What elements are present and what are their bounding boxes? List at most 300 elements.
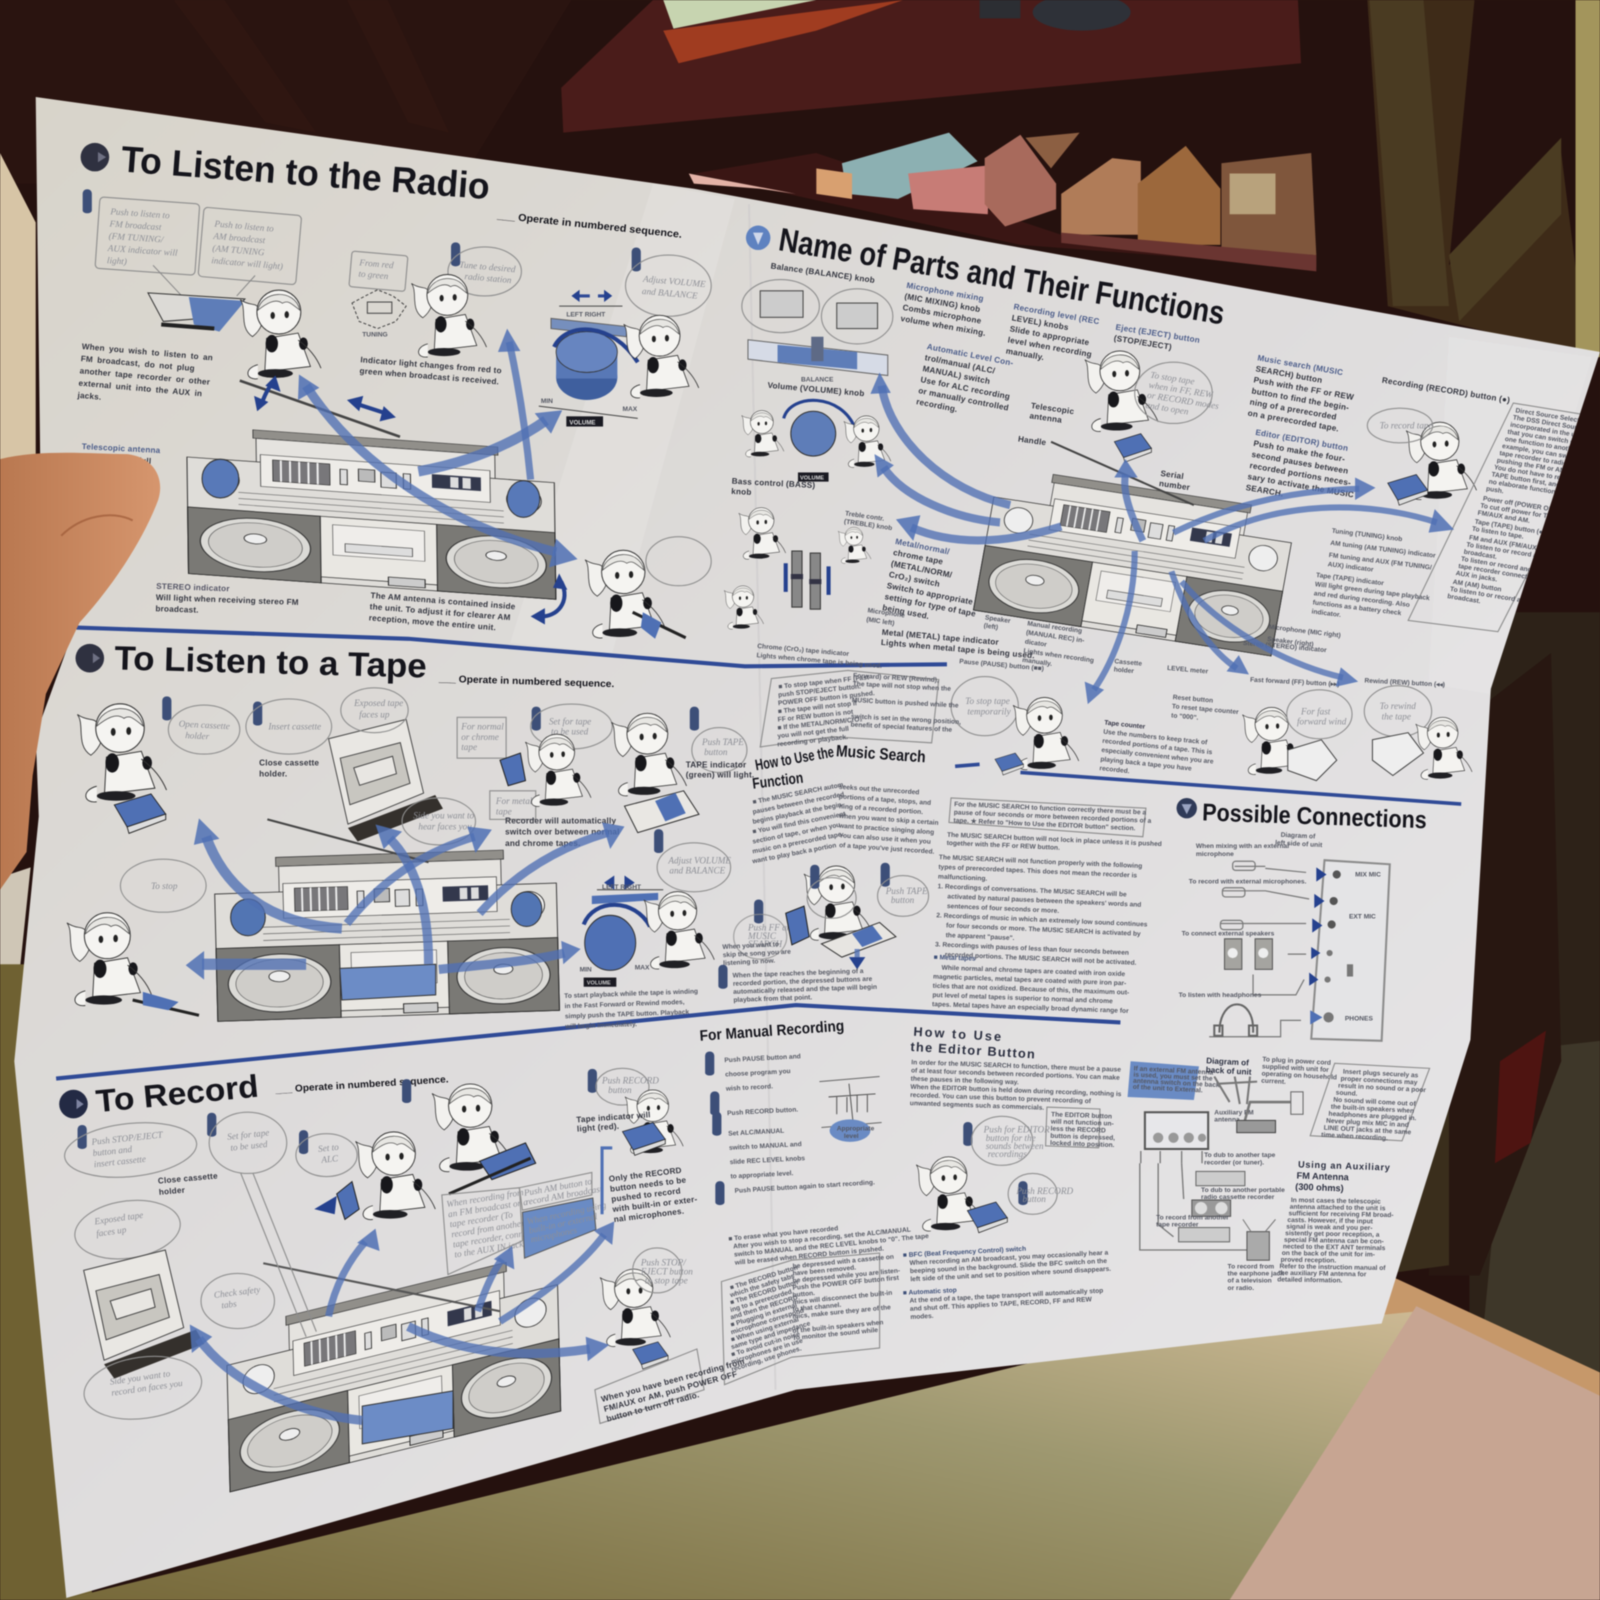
box: power notes: Insert plugs securely as [1343,1068,1419,1079]
note: start playback: To start playback while the tape is winding [564,988,698,1000]
character: set to ALC [356,1132,435,1220]
note: telescopic antenna: Pull out to its full [81,453,152,466]
back panel diagram: of the unit to External. [1133,1084,1203,1094]
note: close cassette holder: holder [159,1186,186,1197]
text: malfunctioning list: for four seconds or more. The MUSIC SEARCH is activated by [946,922,1141,938]
title: Name of Parts and Their Functions: Name of Parts and Their Functions [776,220,1227,331]
label: to record from telephone: To record from [1228,1263,1274,1270]
box: FM broadcast: tape recorder (To [449,1209,514,1229]
step 5 bubble [588,1068,659,1105]
arrow: to eject [1114,459,1143,541]
text: When the EDITOR button is held down during recording, nothing is [910,1084,1122,1098]
label: tape counter: playing back a tape you have [1100,756,1192,773]
step 5 bubble: button [608,1085,632,1095]
label: metal indicator: Lights when metal tape is being used. [881,638,1035,660]
bubble: push tape: Push TAPE [885,886,928,896]
bubble: FF: For fast [1300,706,1331,716]
note: FM broadcast: external unit into the AUX in [78,379,203,398]
box: direct source selector: To listen to tape. [1471,526,1524,541]
switch [500,753,526,786]
bubble: record: To record tape [1380,421,1433,431]
character: pause [1013,697,1079,770]
volume knob: VOLUME [569,419,596,426]
box: power notes: time when recording. [1321,1132,1388,1142]
text: music search intro: ning of a recorded portion. [839,803,923,816]
step 1 callout boxes: AUX indicator will [107,243,178,258]
boombox: record [226,1250,561,1492]
box: power notes: Never plug mix MIC in and [1326,1118,1409,1129]
section: Name of Parts and Their Functions [724,220,1600,784]
character: listener [724,586,764,629]
box: record notes: ing to a prerecorded [730,1289,793,1314]
label: record button: Recording (RECORD) button (●) [1381,376,1511,405]
device: tv or radio [1243,1219,1276,1260]
text: when tape reaches [718,965,877,1004]
character: stop [67,913,151,1006]
bubble: pause: To stop tape [965,696,1010,706]
back panel diagram: is used, you must set the [1133,1072,1213,1083]
bubble: side you want: record on faces you [111,1378,184,1398]
step 1 callout boxes: Push to listen to [213,218,275,234]
label: microphone mixing: Microphone mixing [906,281,984,303]
bubble: side you want: Side you want to [109,1368,171,1387]
bubble: push stop [633,1248,693,1293]
label: recording level: manually. [1005,347,1045,362]
box: direct source selector: You do not have to release the [1494,464,1589,486]
arrow: press down [849,949,865,969]
power cord [1237,1092,1303,1133]
text: when tape reaches: recorded portion, the depressed buttons are [733,976,873,988]
bubble: FF [1287,690,1352,739]
text: auxiliary: casts. However, if the input [1287,1217,1374,1225]
box: direct source selector: example, you can switch from [1502,443,1596,465]
text: music search lock: The MUSIC SEARCH button will not lock in place unless it is pushed [947,832,1162,848]
box: top note: you will not get the full [777,726,849,740]
box: power off: FM/AUX or AM, push POWER OFF [603,1369,738,1414]
box: direct source selector: To cut off power for TAPE, [1480,503,1563,522]
label: speaker left, manual rec: Speaker [984,614,1011,625]
step 1 bubble: Open cassette [178,719,230,731]
box: direct source selector: AUX in jacks. [1455,570,1498,584]
label: to plug in: current. [1261,1078,1286,1086]
arrow: to record [1173,478,1376,533]
text: music search intro: want to play back a portion [751,842,837,866]
character: stop [600,1269,670,1347]
text: music search intro [740,781,941,866]
note: only record: with built-in or exter- [611,1195,698,1214]
knob: MAX [635,964,650,971]
function pad [449,1143,536,1194]
unit side panel [1311,860,1390,1041]
label: antenna / handle / serial: antenna [1029,411,1063,425]
box: record notes: of the built-in speakers when [792,1319,884,1335]
text: unwanted segments such as commercials. [910,1100,1044,1112]
box: editor note: locked into position. [1050,1140,1115,1149]
callout: from red to green: From red [358,257,394,270]
step 2 bubble: Set for tape [227,1127,270,1142]
arrow: to mic mix [870,372,1010,505]
antenna [263,1263,500,1311]
heading: using an auxiliary FM antenna: (300 ohms) [1295,1182,1344,1193]
label: microphone left: (MIC left) [866,616,895,627]
box: built-in mic [522,1198,611,1258]
text: automatic stop: At the end of a tape, the tape transport will automatically stop [909,1288,1103,1305]
step 4: Push PAUSE button again to start recording. [734,1179,875,1195]
arrow: stop [194,818,342,929]
label: chrome indicator: Chrome (CrO₂) tape indicator [757,643,850,658]
step 5 bubble: and BALANCE [669,865,726,875]
cassette illustration [329,719,443,842]
label: antenna / handle / serial: Serial [1160,469,1184,481]
heading: using an auxiliary FM antenna: FM Antenna [1296,1171,1350,1182]
arrow: alc [329,1229,380,1316]
speakers [1224,939,1272,969]
bubble: REW [1364,686,1432,737]
box: top note: push STOP/EJECT button. [778,683,861,699]
label: metal switch: (METAL/NORM/ [890,559,953,580]
box: direct source selector: broadcast. [1447,593,1481,605]
text: auxiliary: detailed information. [1277,1276,1343,1285]
label: tape counter: Tape counter [1104,720,1146,731]
label: speaker left, manual rec: dicator [1024,639,1048,649]
note: only record: pushed to record [611,1186,681,1204]
note: stereo indicator: STEREO indicator [156,582,230,593]
bubble: push stop: to stop tape [645,1276,688,1286]
label: microphone mixing: Combs microphone [902,303,982,326]
label: tuning cluster: AUX) indicator [1327,561,1374,574]
character: press tape [611,713,687,796]
bubble: push FF: Push FF and [747,923,796,933]
panel: music search notes [718,670,1162,1015]
label: tuning cluster: Tape (TAPE) indicator [1316,572,1385,587]
bubble: eject: or RECORD modes [1146,390,1220,411]
antenna [267,819,429,862]
label: tape counter: Use the numbers to keep track of [1103,729,1208,747]
callout: normal chrome [457,717,506,758]
box: record notes: ■ The RECORD button [729,1279,799,1307]
panel: how to use the editor button [903,1024,1123,1321]
text: malfunctioning list: recorded portions. The MUSIC SEARCH will not be activated. [945,951,1137,967]
text: auxiliary: proved reception. [1281,1257,1336,1265]
text: auxiliary: sufficient for receiving FM broad- [1289,1210,1394,1219]
text: automatic stop: ■ Automatic stop [903,1287,957,1297]
bubble: eject: when in FF, REW [1148,380,1215,400]
label: eject: (STOP/EJECT) [1113,334,1172,352]
character: music search [804,866,872,940]
label: tuning cluster: AM tuning (AM TUNING) indicator [1330,540,1436,560]
label: metal switch: CrO₂) switch [888,570,941,589]
subtitle: ___ Operate in numbered sequence. [438,674,615,690]
text: erase: After you wish to stop a recording, set the ALC/MANUAL [733,1226,911,1251]
text: music search intro: ■ The MUSIC SEARCH autom. [752,781,846,806]
label: to record from telephone: the earphone jack [1228,1271,1284,1278]
note: telescopic antenna: place to clear or [79,487,146,499]
label: cassette / LEVEL / reset / counter: holder [1113,666,1135,675]
label: ALC: Automatic Level Con- [926,342,1014,368]
box: record notes: be depressed while you are listen- [792,1267,900,1285]
box: top note: ■ If the METAL/NORM/CrO₂ [777,716,863,732]
box: direct source selector: AM (AM) button [1452,579,1502,594]
text: metal tapes: While normal and chrome tapes are coated with iron oxide [941,965,1126,978]
bubble: push FF [734,899,796,959]
volume knob illustration [767,381,865,482]
box: direct source selector: Tape (TAPE) button (●) [1474,519,1545,537]
text: BFC: ■ BFC (Beat Frequency Control) switch [903,1246,1026,1259]
tuning indicator burst [352,290,406,339]
note: FM broadcast: jacks. [76,391,102,402]
box: record notes: ■ Plugging in external [730,1302,798,1329]
box: record notes: and then the RECORD [730,1294,799,1321]
cassette highlight [362,1391,453,1444]
note: FM broadcast: another tape recorder or other [79,366,211,387]
arrow: to tuning [498,329,531,480]
steps: switch to MANUAL and [729,1141,802,1152]
box: record notes: recording, use phones. [731,1345,803,1373]
bubble: check safety tabs [201,1273,274,1329]
text: music search intro: music on a prerecorded tape. [752,831,844,855]
label: diagram of back: back of unit [1206,1065,1252,1077]
bubble: FF: forward wind [1297,716,1347,726]
character: adjust [644,892,714,969]
labels: connections: To connect external speakers [1182,931,1275,938]
text: these pauses in the following way. [911,1076,1019,1086]
note: recorder automatically: Recorder will automatically [505,816,616,825]
bubble: check safety tabs: Check safety [213,1284,262,1300]
box: editor note [1046,1107,1116,1149]
box: power notes: sound. [1336,1090,1358,1098]
callout: normal chrome: tape [461,742,477,752]
bubble: push editor: sounds between [986,1141,1044,1151]
label: recording level: level when recording [1007,335,1093,359]
box: record notes: be depressed with a cassette on [792,1254,894,1270]
cassette illustration [84,1250,204,1379]
eject pad [114,794,166,833]
text: music search intro: section of tape, or when you [752,822,841,846]
balance slider and arrows: LEFT RIGHT [566,311,605,318]
step 4 bubble [690,707,747,772]
label: ALC: Use for ALC recording [920,375,1011,401]
text: music search lock: together with the FF or REW button. [946,840,1060,852]
steps: to appropriate level. [730,1170,794,1180]
box: FM broadcast [442,1186,536,1274]
box: record notes [708,1253,906,1385]
note: start playback: simply push the TAPE button. Playback [565,1009,690,1020]
text: when you want: listening to now. [723,958,776,967]
step 2 bubble: tune: radio station [464,271,512,285]
step 3 bubble: adjust [626,247,711,316]
character: eject [1085,351,1158,431]
label: metal switch: Switch to appropriate [886,581,974,607]
character: loud [844,416,891,467]
pads [786,906,896,957]
note: recorder automatically: switch over between normal [505,828,620,837]
text: when tape reaches: When the tape reaches the beginning of a [732,968,864,980]
text: when you want: skip the song you are [723,949,791,959]
text: malfunctioning list: 2. Recordings of music in which an extremely low sound continues [936,912,1148,929]
pad: stop [633,1342,668,1369]
tuning indicator burst: TUNING [362,332,388,339]
label: tuning cluster: functions as a battery check [1312,599,1402,617]
boombox knobs highlighted [202,459,540,517]
box: FM broadcast: an FM broadcast or a [447,1197,529,1219]
box: built-in mic: microphones [530,1225,578,1244]
subtitle: ___ Operate in numbered sequence. [274,1074,449,1096]
note: telescopic antenna: Telescopic antenna [82,442,161,455]
eject pad [1114,434,1151,462]
box: power off: button to turn off radio. [606,1390,700,1424]
box: top note: recording or playback. [777,734,848,748]
bubble: push tape [878,863,929,916]
level meter diagram: level [844,1133,859,1140]
box: top note: ■ The tape will not stop if [778,700,858,715]
labels: dubbing: recorder (or tuner). [1204,1159,1264,1166]
label: music search: button to find the begin- [1251,386,1350,413]
step 5 bubble: Push RECORD [601,1076,659,1086]
arrow: to bass [874,454,1000,522]
section: To Record [59,1068,751,1492]
pad: editor [967,1202,1007,1233]
bubble: push FF: SEARCH [748,939,783,949]
step 1 callout boxes: Push to listen to [109,206,170,220]
steps: choose program you [725,1068,791,1079]
steps: Set ALC/MANUAL [728,1128,784,1138]
balance illustration [742,261,893,384]
title: To Listen to the Radio: To Listen to the Radio [120,139,491,207]
heading: using an auxiliary FM antenna: Using an Auxiliary [1298,1159,1391,1173]
box: power notes: the built-in speakers when [1331,1104,1414,1115]
text: malfunctioning list: 1. Recordings of conversations. The MUSIC SEARCH will be [937,883,1127,899]
step 3 bubble: Set for tape [549,716,591,726]
step 3 bubble: Set to [318,1142,340,1154]
arrow: to power block [1204,507,1454,541]
label: speaker left, manual rec: (left) [983,623,998,631]
label: music search: Music search (MUSIC [1257,353,1344,377]
step number 1 [83,189,92,213]
heading: how to use the music search function: How to Use the [754,744,835,774]
label: to record from telephone: or radio. [1228,1285,1254,1292]
heading: the Editor Button [910,1039,1035,1061]
label: to plug in: To plug in power cord [1262,1056,1331,1067]
box: FM broadcast: tape recorder, connect [452,1227,535,1249]
text: malfunctioning list: 3. Recordings with pauses of less than four seconds between [935,941,1129,957]
character: treble [838,527,871,563]
boombox: parts [973,466,1297,656]
icon: section bullet [59,1090,88,1118]
text: music search intro: begins playback at the begin- [752,801,844,826]
arrow: dark antenna tilt [254,376,281,411]
step 1 callout boxes: indicator will light) [211,255,283,271]
box: record notes: To monitor the sound while [792,1327,879,1342]
step 3 bubble: ALC [320,1153,339,1165]
box: direct source selector: tape recorder to radio simply by [1499,450,1600,473]
note: indicator light: Indicator light changes from red to [360,355,502,375]
text: malfunctioning list: the apparent "pause". [945,932,1015,942]
text: auxiliary: signal is weak and you per- [1286,1223,1373,1232]
box: direct source selector: To listen or record another [1460,556,1545,576]
label: cassette / LEVEL / reset / counter: Cassette [1114,658,1143,668]
characters: FF [1242,707,1303,775]
box: top note: benefit of special features of the [850,721,953,734]
text: automatic stop: modes. [910,1313,934,1321]
box: record notes: button. [792,1290,815,1299]
box: direct source selector: broadcast. [1463,549,1497,561]
box: top note [760,670,963,748]
box: record notes: same type and impedance [730,1320,811,1351]
box: power notes: result in no sound or a poor [1338,1083,1427,1094]
box: record notes: microphone correspond [730,1307,805,1336]
text: music search intro: portions of a tape, stops, and [839,794,931,807]
box: FM broadcast: record from another [450,1218,525,1239]
label: editor: sary to activate the MUSIC [1247,472,1355,500]
text: malfunctioning list: activated by natural pauses between the speakers' words and [947,893,1141,909]
connection arrows [1309,867,1327,1024]
arrow: to volume [418,410,562,471]
box: editor note: button is depressed, [1050,1133,1115,1142]
arrow: dark double horizontal [347,396,396,421]
boombox: radio [187,425,556,599]
FF button [1288,740,1337,781]
step 2 bubble [207,1112,316,1337]
balance slider [592,876,663,904]
box: direct source selector [1408,401,1600,632]
note: FM broadcast: When you wish to listen to an [81,342,213,362]
text: erase: ■ To erase what you have recorded [728,1225,839,1243]
volume knob illustration: Volume (VOLUME) knob [767,381,865,398]
callout: metal [490,791,536,819]
note: AM antenna: the unit. To adjust it for clearer AM [369,602,511,622]
text: when tape reaches: automatically released and the tape will begin [733,984,877,996]
text: BFC: beeping sound in the background. Slide the BFC switch on the [910,1258,1107,1275]
step 3 bubble [531,704,612,749]
text: BFC: When recording an AM broadcast, you may occasionally hear a [909,1250,1109,1267]
balance illustration: Balance (BALANCE) knob [770,261,875,285]
label: music search: Push with the FF or REW [1253,375,1355,402]
box: record notes: ■ The RECORD button [729,1264,799,1292]
box: power off [595,1349,751,1424]
text: auxiliary: nected to the EXT ANT terminals [1283,1243,1386,1252]
note: close cassette holder: Close cassette [158,1171,218,1186]
icon: section bullet [746,226,770,250]
label: ALC: trol/manual (ALC/ [924,353,996,376]
bubble: push record: button [1022,1194,1046,1204]
box: direct source selector: push. [1486,486,1504,495]
label: metal switch: chrome tape [892,548,944,567]
label: diagram of left side: Diagram of [1281,832,1316,841]
text: auxiliary: special FM antenna can be con- [1284,1237,1384,1245]
title: Possible Connections: Possible Connections [1202,799,1427,834]
characters: volume comparison [742,410,784,457]
box: direct source selector: FM/AUX and AM. [1477,510,1530,525]
character: bass [739,508,786,559]
text: auxiliary: on the back of the unit for im- [1282,1250,1375,1259]
note: close cassette holder: Close cassette [259,758,319,767]
labels: connections: When mixing with an external [1196,843,1289,850]
note: only record: button needs to be [610,1175,687,1194]
bubble: radio off [646,537,711,586]
label: cassette / LEVEL / reset / counter: To reset tape counter [1172,703,1239,716]
bubble: side you want: hear faces you [418,822,472,832]
step 4 bubble: button [704,747,728,757]
arrow: stop [408,1327,609,1361]
callout: from red to green: to green [358,269,389,281]
character: set switch [525,734,591,806]
character: adjusting [624,315,699,398]
text: auxiliary: the auxiliary FM antenna for [1278,1270,1367,1278]
box: direct source selector: TAPE button first, and there are [1491,471,1590,494]
label: tuning cluster: and red during recording. Also [1313,590,1410,609]
bubble: pause [951,677,1018,736]
box: FM broadcast: to the AUX IN jacks. [454,1238,530,1260]
